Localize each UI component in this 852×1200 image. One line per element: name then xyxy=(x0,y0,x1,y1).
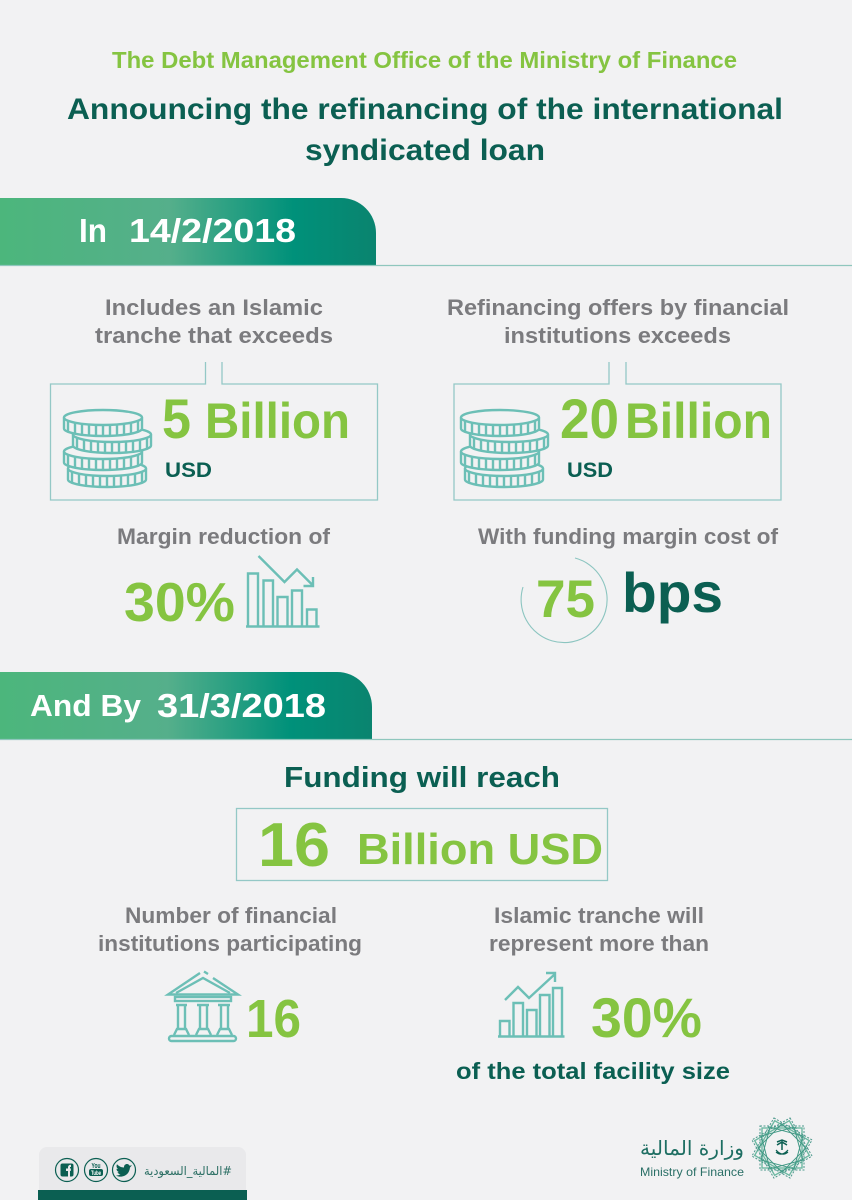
amount: Billion xyxy=(625,393,772,449)
amount: 20 xyxy=(560,387,619,450)
value: 30% xyxy=(124,571,235,633)
logo wordmark xyxy=(640,1136,744,1179)
supertitle: The Debt Management Office of the Ministry of Finance xyxy=(112,47,737,73)
panel: institutions participating xyxy=(98,903,362,1049)
caption: Includes an Islamic xyxy=(105,295,323,320)
amount: 5 xyxy=(162,387,191,450)
callout box xyxy=(454,362,781,500)
circle ring xyxy=(521,558,607,643)
icon: coins xyxy=(64,410,151,487)
caption: institutions exceeds xyxy=(504,323,731,348)
unit: bps xyxy=(622,561,723,624)
icon: falling bar chart xyxy=(246,556,320,627)
amount xyxy=(162,387,350,450)
currency: USD xyxy=(165,459,212,482)
logo wordmark: وزارة المالية xyxy=(640,1136,744,1160)
panel: funding total xyxy=(236,762,608,880)
value: 16 xyxy=(246,989,301,1049)
amount: Billion USD xyxy=(357,825,603,874)
hashtag: #المالية_السعودية xyxy=(144,1164,232,1179)
icon: youtube xyxy=(84,1158,108,1182)
icon: youtube: Tube xyxy=(91,1171,101,1177)
emblem xyxy=(752,1118,812,1178)
ministry logo xyxy=(640,1118,812,1179)
panel: Islamic tranche xyxy=(50,295,378,500)
section banner: 31/3/2018: And By xyxy=(30,688,142,723)
panel: refinancing offers xyxy=(447,295,789,500)
section banner: 31/3/2018: 31/3/2018 xyxy=(157,687,326,724)
caption: of the total facility size xyxy=(456,1058,730,1084)
icon: twitter xyxy=(112,1158,136,1182)
amount: Billion xyxy=(205,393,350,449)
panel: institutions participating: Number of financial xyxy=(125,903,337,928)
footer social tab xyxy=(38,1147,247,1200)
panel: margin reduction: Margin reduction of xyxy=(117,524,331,549)
caption: tranche that exceeds xyxy=(95,323,333,348)
main title: Announcing the refinancing of the international xyxy=(67,93,783,126)
caption: Refinancing offers by financial xyxy=(447,295,789,320)
header xyxy=(67,47,783,167)
amount: 16 xyxy=(258,811,330,880)
icon: coins xyxy=(461,410,548,487)
panel: institutions participating: institutions participating xyxy=(98,931,362,956)
value: 75 xyxy=(536,570,595,629)
caption xyxy=(447,295,789,348)
icon: facebook xyxy=(56,1158,78,1182)
icon: bank xyxy=(168,972,238,1041)
main title xyxy=(67,93,783,167)
section banner: 14/2/2018 xyxy=(0,198,852,266)
icon: youtube: You xyxy=(92,1163,100,1170)
icon: rising bar chart xyxy=(498,973,564,1036)
section banner: 14/2/2018: In xyxy=(79,212,107,249)
currency: USD xyxy=(567,459,613,482)
panel: Islamic tranche share: Islamic tranche will xyxy=(494,903,704,928)
panel: margin reduction xyxy=(117,524,331,633)
panel: funding total: Funding will reach xyxy=(284,762,560,794)
panel: funding margin cost xyxy=(478,524,779,643)
amount xyxy=(258,811,603,880)
main title: syndicated loan xyxy=(305,134,545,167)
value: 30% xyxy=(591,986,702,1049)
panel: Islamic tranche share: represent more than xyxy=(489,931,709,956)
panel: Islamic tranche share xyxy=(456,903,730,1084)
box xyxy=(236,808,608,880)
callout box xyxy=(50,362,378,500)
section banner: 14/2/2018: 14/2/2018 xyxy=(129,212,296,249)
section banner: 31/3/2018 xyxy=(0,672,852,740)
caption xyxy=(95,295,333,348)
panel: funding margin cost: With funding margin cost of xyxy=(478,524,779,549)
amount xyxy=(560,387,772,450)
logo wordmark: Ministry of Finance xyxy=(640,1165,744,1179)
